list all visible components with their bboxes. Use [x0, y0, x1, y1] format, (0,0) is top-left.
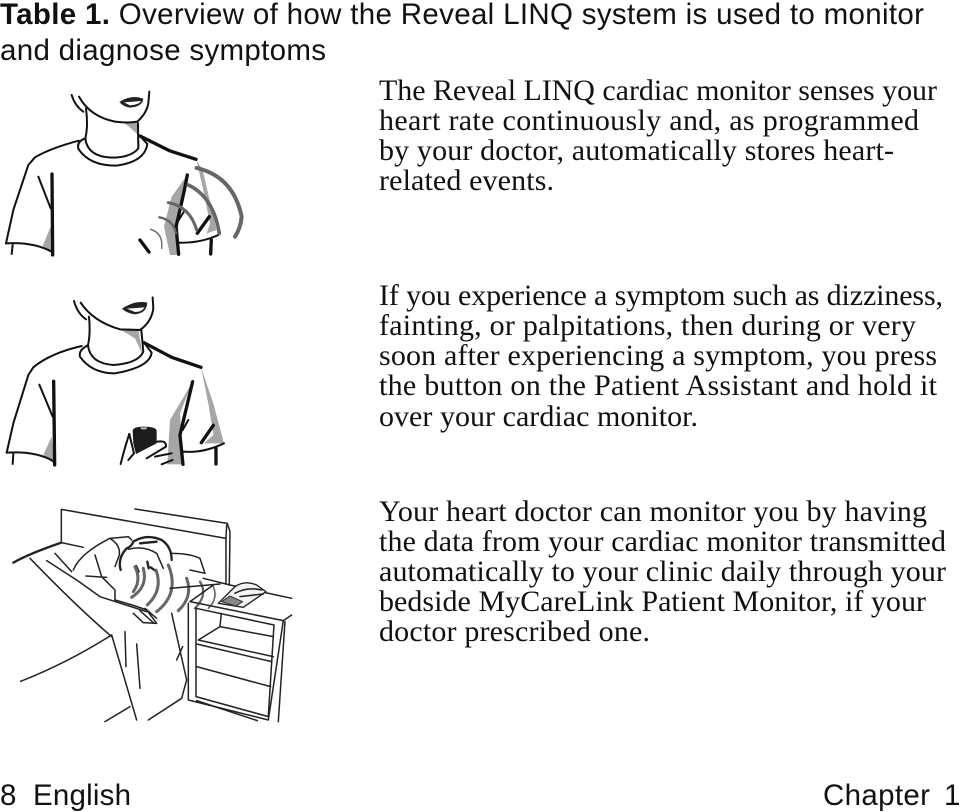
text block: patient assistant: fainting, or palpitations, then during or very: [379, 309, 916, 342]
sleeping patient: [73, 537, 172, 623]
footer: page number: 8: [0, 779, 16, 812]
footer: chapter: Chapter: [823, 779, 930, 812]
blanket: [105, 613, 187, 722]
title: and diagnose symptoms: [0, 34, 326, 67]
text block: remote monitoring: doctor prescribed one.: [379, 615, 650, 648]
nightstand: [188, 585, 292, 722]
text block: remote monitoring: automatically to your clinic daily through your: [379, 555, 946, 588]
title: [0, 0, 924, 67]
text block: continuous sensing: [379, 74, 937, 197]
text block: patient assistant: If you experience a symptom such as dizziness,: [379, 279, 943, 312]
bedding and pillow: [13, 543, 230, 681]
illustration: sleeping patient with bedside monitor: [13, 509, 292, 722]
text block: continuous sensing: related events.: [379, 164, 554, 197]
text block: continuous sensing: The Reveal LINQ cardiac monitor senses your: [379, 74, 937, 107]
text block: patient assistant: over your cardiac monitor.: [379, 400, 698, 433]
text block: remote monitoring: Your heart doctor can monitor you by having: [379, 495, 927, 528]
icon: MyCareLink Patient Monitor: [218, 583, 266, 607]
icon: Patient Assistant device: [121, 427, 173, 464]
text block: patient assistant: [379, 279, 943, 433]
text block: continuous sensing: heart rate continuously and, as programmed: [379, 104, 919, 137]
illustration: pressing the Patient Assistant: [7, 297, 224, 465]
text block: remote monitoring: the data from your cardiac monitor transmitted: [379, 525, 946, 558]
icon: signal rings: [132, 565, 220, 612]
illustration: monitor senses heart rate: [6, 92, 242, 255]
text block: continuous sensing: by your doctor, automatically stores heart-: [379, 134, 894, 167]
footer: chapter: 1: [944, 779, 960, 812]
icon: signal waves: [151, 168, 242, 248]
text block: remote monitoring: [379, 495, 946, 648]
footer: page number: English: [33, 779, 131, 812]
text block: patient assistant: soon after experiencing a symptom, you press: [379, 339, 937, 372]
text block: remote monitoring: bedside MyCareLink Patient Monitor, if your: [379, 585, 926, 618]
text block: patient assistant: the button on the Patient Assistant and hold it: [379, 369, 938, 402]
